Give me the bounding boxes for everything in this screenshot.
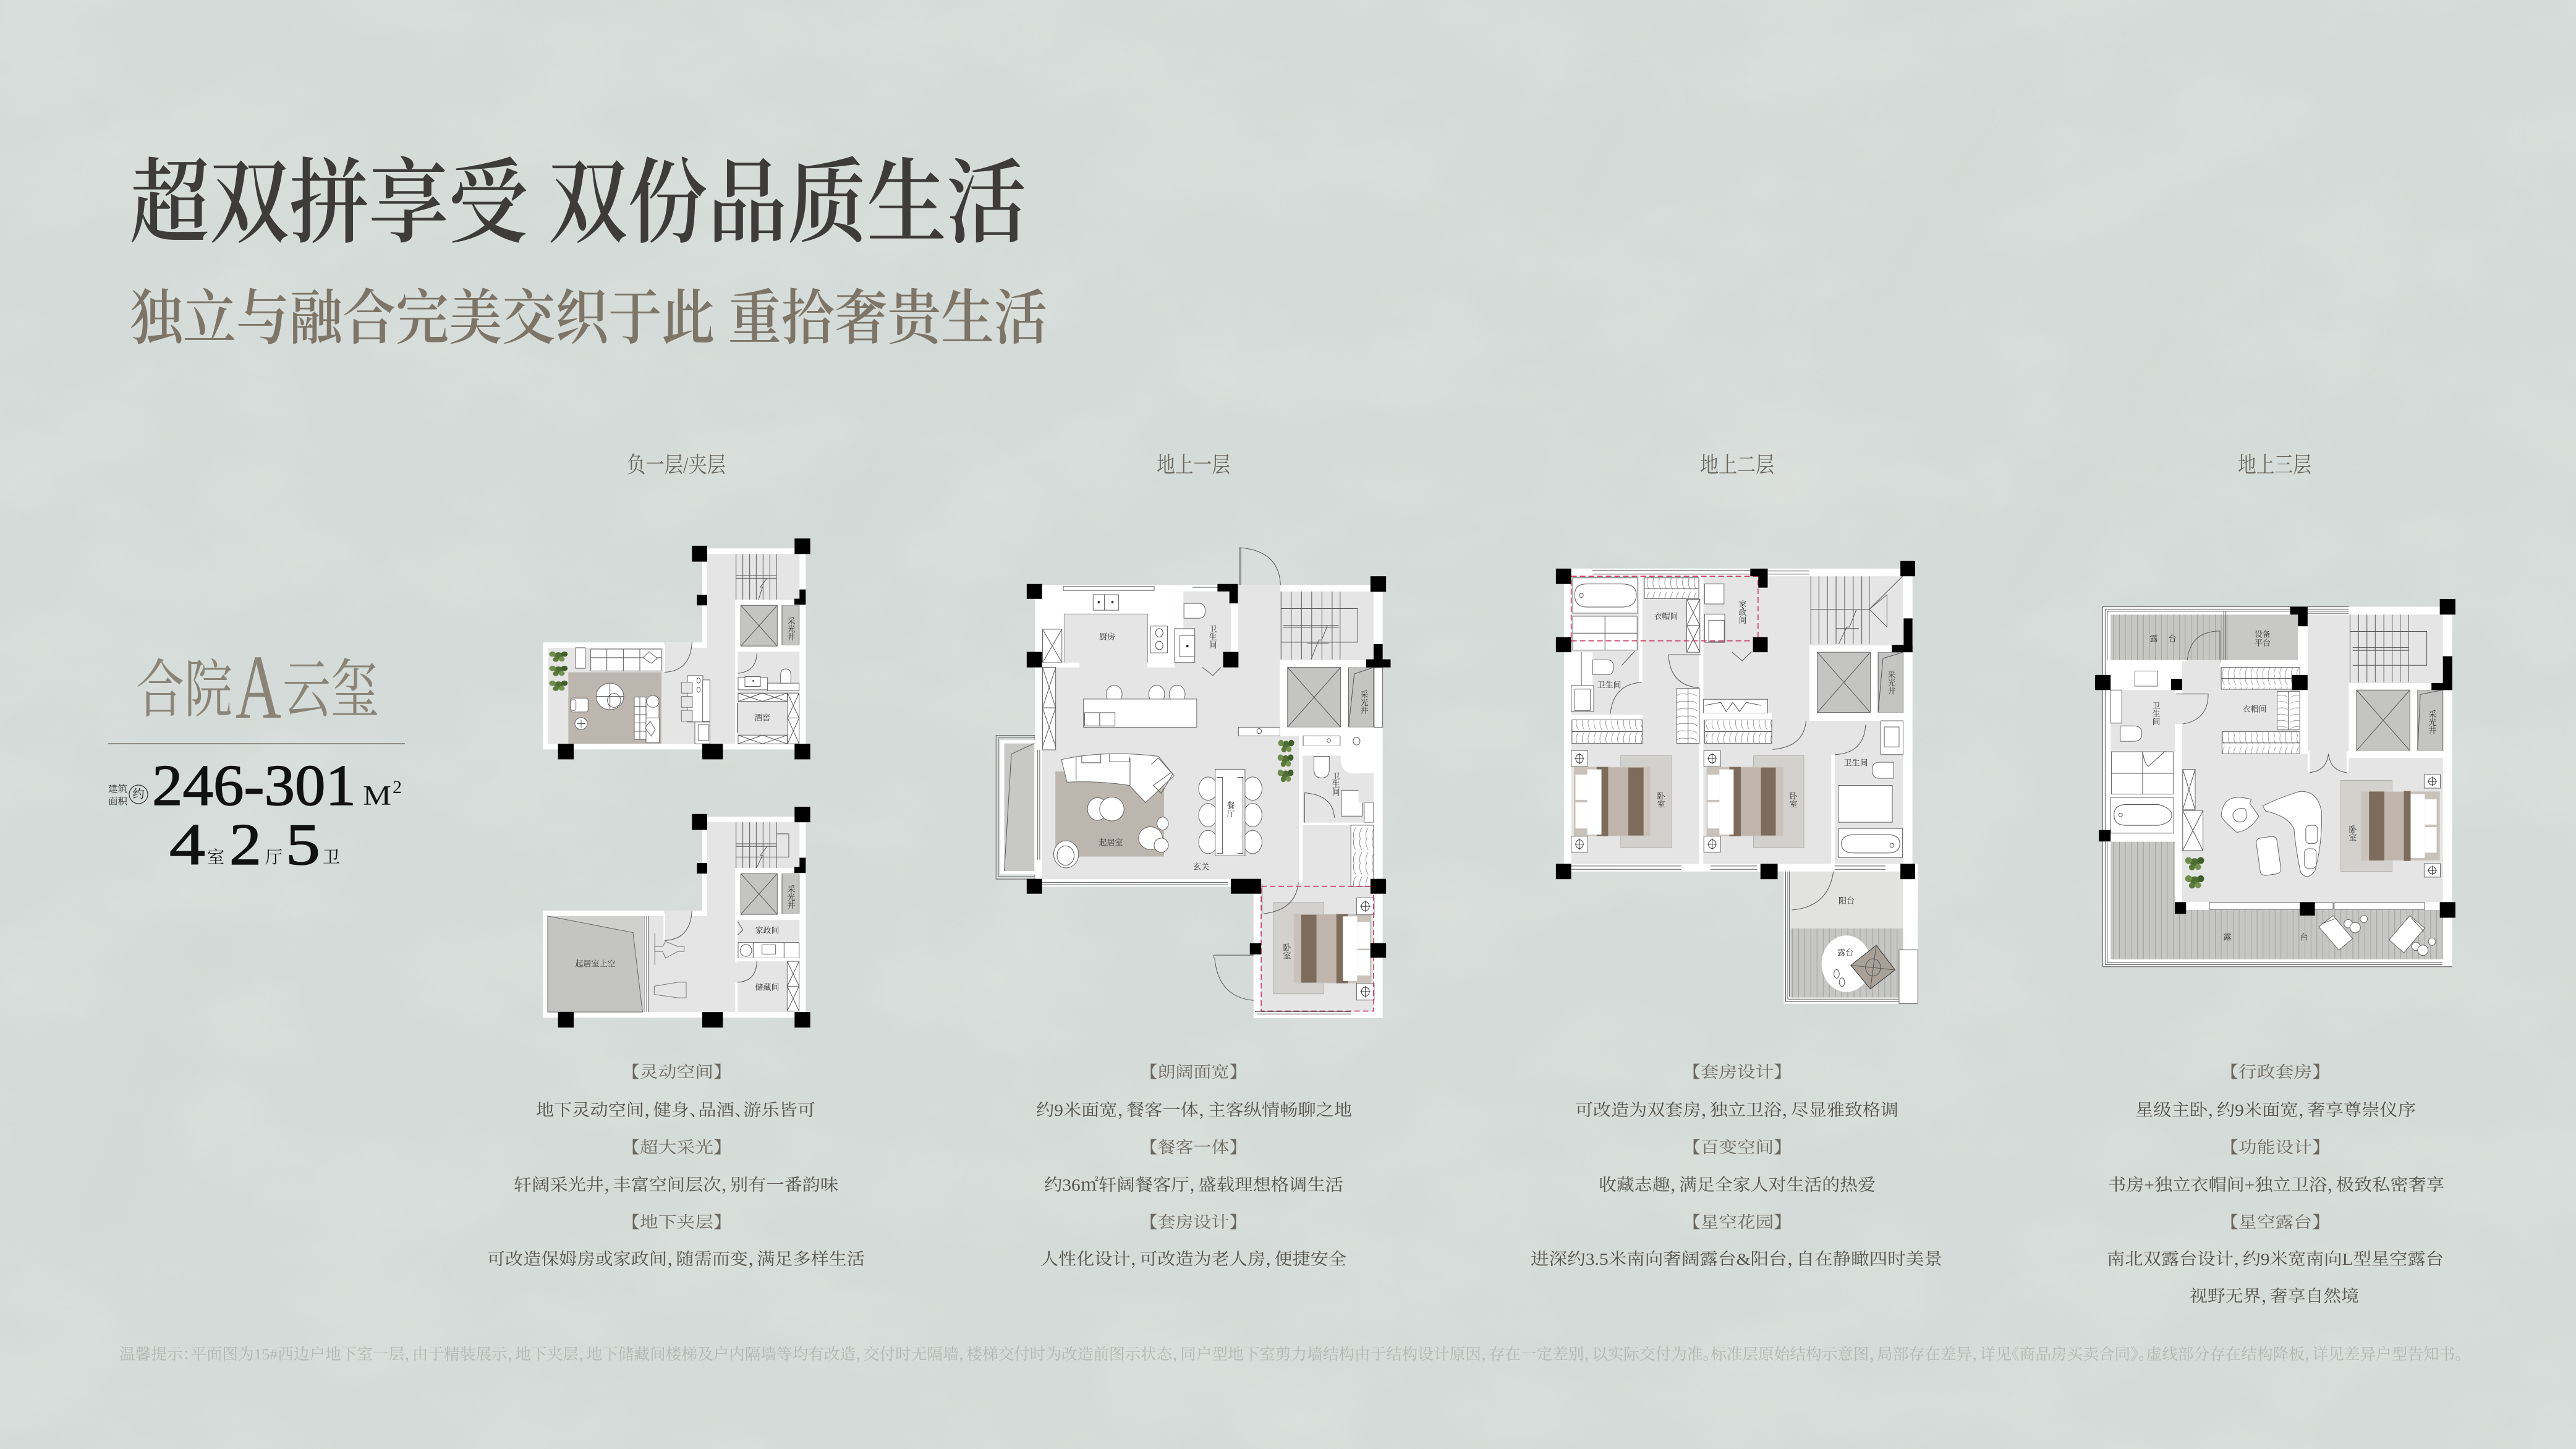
- area label: [108, 784, 148, 807]
- bathroom 2: [1299, 735, 1374, 882]
- living room: [1053, 754, 1174, 868]
- plant: [1278, 740, 1294, 782]
- description: level 1: 【朗阔面宽】: [1149, 1063, 1238, 1081]
- window wall: [2182, 902, 2443, 910]
- description: level 1: 约36㎡轩阔餐客厅，盛载理想格调生活: [1044, 1176, 1343, 1194]
- wardrobe: [1351, 825, 1374, 886]
- room labels: level 2: 阳台: [1838, 896, 1855, 905]
- description: level 1: 【套房设计】: [1149, 1213, 1238, 1231]
- doors: [1214, 548, 1280, 1000]
- room labels: level 2: [1597, 600, 1895, 957]
- balcony and terrace: [1783, 864, 1918, 1004]
- unit name: A: [236, 637, 281, 738]
- room labels: level 3: 卧室: [2348, 825, 2357, 841]
- walls and floor: [1035, 585, 1383, 1018]
- description: level 2: 【星空花园】: [1691, 1213, 1783, 1231]
- room labels: level 1: 餐厅: [1225, 801, 1235, 818]
- description: basement: 地下灵动空间，健身、品酒、游乐皆可: [536, 1101, 815, 1120]
- room counts: 2: [229, 812, 261, 877]
- basement plan upper: [543, 538, 810, 759]
- area value: 246-301: [152, 754, 356, 818]
- bedroom right: [1704, 750, 1804, 852]
- description: basement: 轩阔采光井，丰富空间层次，别有一番韵味: [514, 1176, 838, 1194]
- description: level 1: 【餐客一体】: [1149, 1139, 1238, 1157]
- room counts: 厅: [265, 848, 283, 867]
- room labels: level 2: 卧室: [1788, 791, 1798, 808]
- room labels: level 2: 采光井: [1887, 670, 1895, 695]
- shell: [2103, 607, 2452, 967]
- description: level 2: 【套房设计】: [1691, 1063, 1783, 1081]
- title: 超双拼享受 双份品质生活: [130, 153, 1026, 255]
- description: basement: 可改造保姆房或家政间，随需而变，满足多样生活: [487, 1250, 865, 1268]
- room labels: basement: 家政间: [755, 926, 780, 935]
- room labels: level 1: 卫生间: [1330, 771, 1340, 796]
- description: level 2: [1531, 1063, 1942, 1268]
- wardrobes: [2183, 668, 2300, 851]
- description: level 3: 【行政套房】: [2229, 1063, 2321, 1081]
- unit name: [136, 637, 379, 738]
- floor plan: basement: [543, 538, 810, 1027]
- description: level 3: 书房+独立衣帽间+独立卫浴，极致私密奢享: [2108, 1176, 2444, 1194]
- footnote: 温馨提示：平面图为15#西边户地下室一层，由于精装展示，地下夹层，地下储藏间楼梯及户内隔墙等均有改造，交付时无隔墙，楼梯交付时为改造前图示状态，同户型地下室剪力墙结构由于结构设计原因，存在一定差别，以实际交付为准。标准层原始结构示意图，局部存在差异，详见《商品房买卖合同》。虚线部分存在结构降板，详见差异户型告知书。: [119, 1346, 2463, 1363]
- basement plan lower: [543, 807, 810, 1027]
- room labels: basement: 起居室上空: [575, 959, 616, 968]
- room labels: level 1: 卧室: [1282, 943, 1291, 959]
- description: level 3: 视野无界，奢享自然境: [2190, 1287, 2359, 1306]
- bathroom: [2111, 661, 2208, 902]
- unit name: 合院: [136, 656, 232, 726]
- area label: 约: [132, 788, 145, 801]
- lounge furniture: [2221, 791, 2321, 877]
- subtitle: 独立与融合完美交织于此 重拾奢贵生活: [130, 286, 1047, 352]
- floor plan: level 1: [996, 548, 1390, 1018]
- columns: [2095, 599, 2455, 918]
- bathroom 1: [1171, 592, 1238, 676]
- description: level 2: 进深约3.5米南向奢阔露台&阳台，自在静瞰四时美景: [1531, 1250, 1942, 1268]
- kitchen: [1042, 592, 1196, 668]
- description: basement: 【灵动空间】: [631, 1063, 723, 1081]
- room labels: level 2: 卫生间: [1597, 680, 1622, 690]
- description: level 2: 收藏志趣，满足全家人对生活的热爱: [1599, 1176, 1876, 1194]
- area label: 建筑: [108, 784, 127, 794]
- plant: [2185, 857, 2204, 888]
- room labels: level 2: 家政间: [1737, 600, 1747, 624]
- terraces: [2111, 611, 2443, 959]
- room labels: basement: 储藏间: [755, 983, 780, 992]
- room labels: level 1: 采光井: [1359, 690, 1369, 715]
- suite bath: [1571, 578, 1643, 720]
- floor plan: level 2: [1556, 561, 1918, 1004]
- area value: 2: [393, 777, 402, 797]
- room labels: basement: [575, 617, 795, 992]
- description: level 3: 【功能设计】: [2229, 1139, 2321, 1157]
- lift and light well: [2308, 683, 2443, 773]
- room labels: level 3: [2149, 629, 2437, 942]
- unit information: [108, 637, 405, 877]
- description: level 3: 【星空露台】: [2229, 1213, 2321, 1231]
- room labels: basement: 采光井: [786, 885, 795, 909]
- room counts: 4: [169, 812, 205, 877]
- room labels: level 1: 玄关: [1193, 862, 1209, 872]
- room labels: level 3: 卫生间: [2151, 701, 2160, 726]
- dashed zone: [1571, 576, 1758, 641]
- room labels: level 1: 卫生间: [1208, 624, 1217, 649]
- description: level 1: 人性化设计，可改造为老人房，便捷安全: [1040, 1250, 1346, 1268]
- bedroom left: [1571, 750, 1672, 852]
- room labels: level 3: 平台: [2255, 638, 2271, 648]
- island and stools: [1043, 668, 1197, 750]
- room labels: level 1: 起居室: [1099, 838, 1123, 847]
- bed: [2341, 775, 2441, 877]
- stairs: [1281, 592, 1358, 660]
- description: level 1: 约9米面宽，餐客一体，主客纵情畅聊之地: [1036, 1101, 1352, 1120]
- room labels: level 2: 卧室: [1656, 791, 1665, 808]
- room labels: level 3: 露: [2149, 634, 2158, 643]
- room counts: 5: [286, 812, 320, 877]
- floor heading: level 2: 地上二层: [1700, 453, 1774, 477]
- laundry: [1668, 584, 1806, 749]
- room counts: 室: [207, 848, 224, 867]
- room labels: level 2: 卫生间: [1843, 758, 1868, 768]
- floor plan: level 3: [2095, 599, 2455, 967]
- description: level 2: 可改造为双套房，独立卫浴，尽显雅致格调: [1575, 1101, 1898, 1120]
- room labels: level 3: 采光井: [2427, 710, 2437, 734]
- floor heading: level 3: 地上三层: [2238, 453, 2311, 477]
- floor heading: level 1: 地上一层: [1157, 453, 1230, 477]
- room labels: level 3: 露: [2223, 932, 2232, 942]
- lift and light well: [1238, 660, 1383, 736]
- lift, stairs, light well: [1809, 576, 1903, 721]
- columns: [1027, 576, 1390, 958]
- unit name: 云玺: [283, 656, 379, 726]
- room labels: basement: 采光井: [786, 617, 795, 641]
- area label: 面积: [108, 796, 128, 807]
- room labels: level 2: 露台: [1837, 948, 1853, 957]
- room labels: level 2: 衣帽间: [1654, 612, 1678, 621]
- room labels: level 3: 台: [2168, 634, 2177, 643]
- description: level 3: 星级主卧，约9米面宽，奢享尊崇仪序: [2135, 1101, 2416, 1120]
- balcony: [996, 735, 1035, 879]
- bedroom: [1255, 882, 1374, 1014]
- description: level 1: [1036, 1063, 1352, 1268]
- dining: [1199, 769, 1262, 856]
- description: level 3: [2107, 1063, 2444, 1306]
- room counts: [169, 812, 340, 877]
- room labels: level 3: 台: [2300, 932, 2308, 942]
- area value: M: [363, 780, 391, 811]
- wardrobes: [1572, 578, 1772, 743]
- description: basement: 【超大采光】: [631, 1139, 723, 1157]
- floor heading: basement: 负一层/夹层: [627, 453, 726, 477]
- description: level 3: 南北双露台设计，约9米宽南向L型星空露台: [2107, 1250, 2444, 1268]
- bathroom 3: [1831, 721, 1903, 864]
- columns: [1556, 561, 1915, 879]
- room counts: 卫: [323, 848, 340, 867]
- room labels: basement: 酒窖: [754, 713, 770, 722]
- room labels: level 3: 衣帽间: [2242, 705, 2267, 713]
- stairs: [2350, 614, 2427, 682]
- description: basement: 【地下夹层】: [631, 1213, 723, 1231]
- room labels: level 1: [1099, 624, 1369, 959]
- main floor: [2182, 609, 2443, 902]
- description: basement: [487, 1063, 865, 1268]
- room labels: level 3: 设备: [2255, 629, 2271, 639]
- walls and floor: [1564, 569, 1913, 872]
- description: level 2: 【百变空间】: [1691, 1139, 1783, 1157]
- room labels: level 1: 厨房: [1099, 632, 1115, 642]
